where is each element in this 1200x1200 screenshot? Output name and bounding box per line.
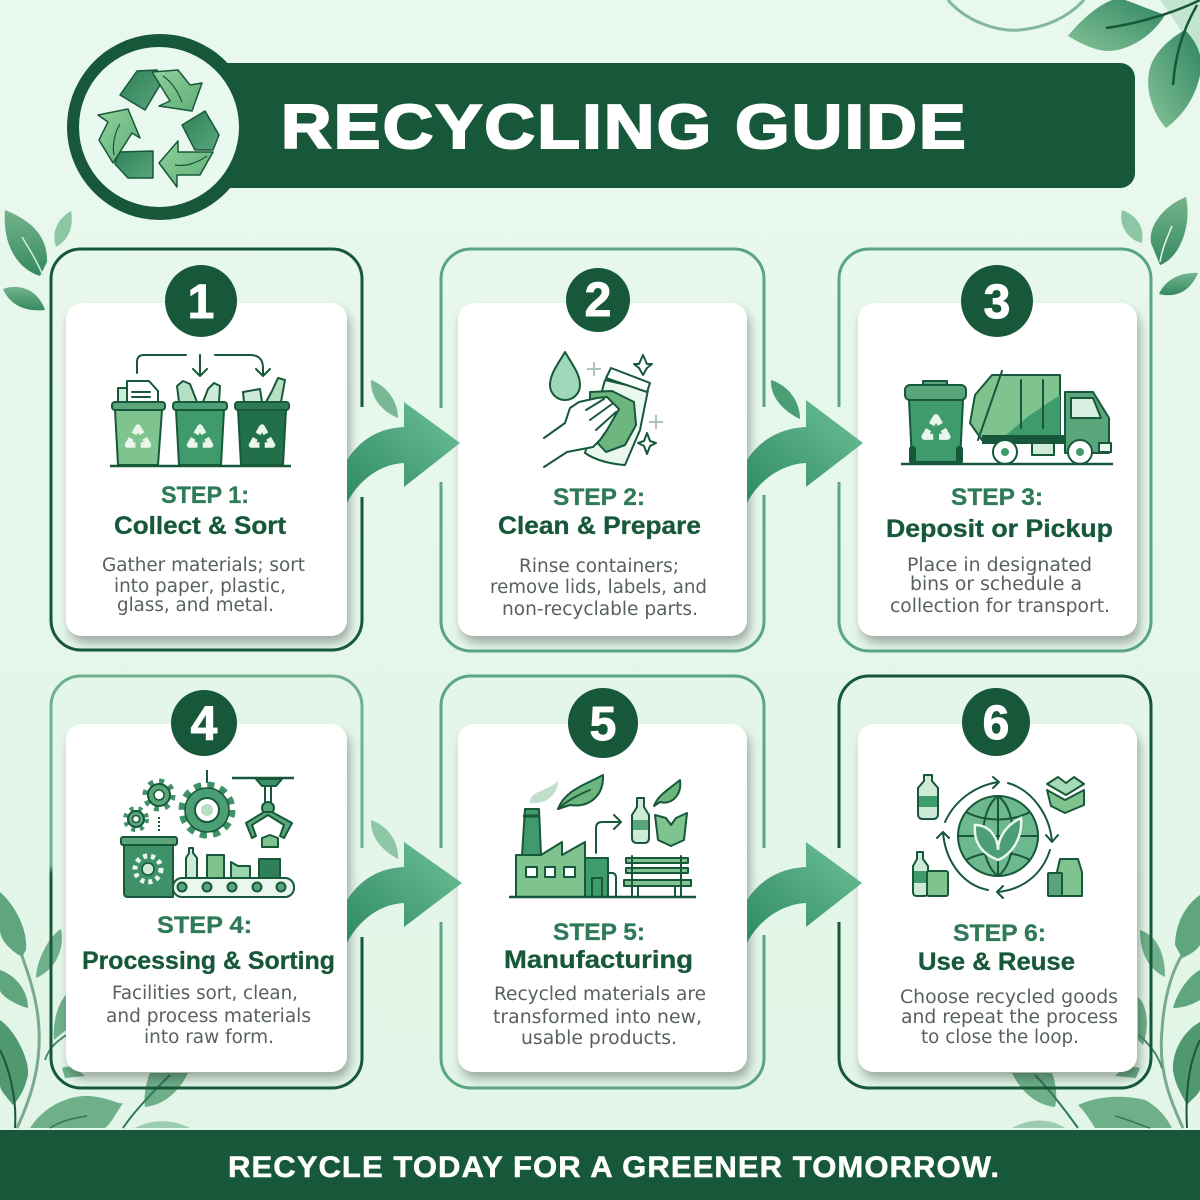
arrow: step 2 to 3 [747,380,863,503]
panel outline [839,676,1151,1088]
step title: Clean & Prepare [498,512,701,540]
footer text: RECYCLE TODAY FOR A GREENER TOMORROW. [228,1151,1000,1184]
icon: three sorting bins [110,355,291,466]
number badge [171,690,237,756]
number badge: 5 [590,698,616,751]
number badge: 3 [984,276,1010,329]
step description [900,987,1118,1048]
step description: Place in designated [907,555,1092,576]
step description [106,983,311,1048]
step description [493,984,706,1049]
panel outline [51,249,362,650]
number badge [962,688,1030,756]
white card [858,303,1137,636]
step description: and repeat the process [901,1007,1118,1028]
number badge [568,688,638,758]
step description: into raw form. [144,1027,274,1048]
step label: STEP 2: [553,484,645,511]
footer banner [0,1130,1200,1200]
icon: wheelie bin and garbage truck [901,371,1113,464]
step description [890,555,1110,617]
step description: bins or schedule a [910,574,1082,595]
step title: Use & Reuse [918,948,1075,976]
step title: Deposit or Pickup [886,515,1113,543]
decorative leaves: top right [948,0,1200,128]
step label: STEP 4: [157,912,252,939]
arrow: step 1 to 2 [347,380,460,503]
header banner [67,34,1135,220]
step description: remove lids, labels, and [490,577,707,598]
white card [458,303,747,636]
step description: glass, and metal. [117,595,274,616]
step description: Rinse containers; [519,556,679,577]
panel: step 4 [51,676,362,1088]
number badge: 2 [585,274,611,327]
white card [66,303,347,636]
panel: step 5 [441,676,764,1088]
step description: into paper, plastic, [114,576,286,597]
step label: STEP 3: [951,484,1043,511]
step description [102,555,305,616]
step description: Choose recycled goods [900,987,1118,1008]
white card [66,724,347,1072]
number badge [566,268,630,332]
panel outline [839,249,1151,651]
panel: step 3 [839,249,1151,651]
step description: collection for transport. [890,596,1110,617]
number badge: 6 [983,697,1009,750]
icon: globe in reuse loop [913,775,1084,898]
step description: and process materials [106,1006,311,1027]
icon: factory with recycled products [509,775,696,897]
logo badge [67,34,253,220]
decorative plant: bottom right [1012,895,1200,1128]
number badge: 4 [191,698,218,751]
decorative leaves: upper left [3,210,72,310]
step description: transformed into new, [493,1007,702,1028]
icon: rinsing a jar [544,352,663,467]
step label: STEP 1: [161,482,249,509]
step label: STEP 6: [953,920,1046,947]
decorative plant: bottom left [0,892,190,1128]
panel outline [441,676,764,1088]
step description: Recycled materials are [494,984,706,1005]
step label: STEP 5: [553,919,645,946]
step description [490,556,707,620]
step description: non-recyclable parts. [502,599,698,620]
arrow: step 5 to 6 [747,842,862,943]
arrow: step 4 to 5 [347,820,462,943]
panel: step 6 [839,676,1151,1088]
panel outline [51,676,362,1088]
number badge [165,265,237,337]
panel: step 2 [441,249,764,651]
step description: usable products. [521,1028,677,1049]
step description: Facilities sort, clean, [112,983,298,1004]
step title: Manufacturing [504,946,693,974]
panel outline [441,249,764,651]
white card [858,724,1137,1072]
icon: gears, claw and conveyor [121,770,294,897]
icon: recycling symbol [98,70,219,187]
number badge [961,265,1033,337]
step description: to close the loop. [921,1027,1079,1048]
title: RECYCLING GUIDE [281,93,968,162]
step title: Processing & Sorting [82,947,335,975]
step title: Collect & Sort [114,512,287,540]
decorative leaves: upper right [1121,197,1198,295]
white card [458,724,747,1072]
panel: step 1 [51,249,362,650]
number badge: 1 [188,276,214,329]
step description: Gather materials; sort [102,555,305,576]
title bar [200,63,1135,188]
